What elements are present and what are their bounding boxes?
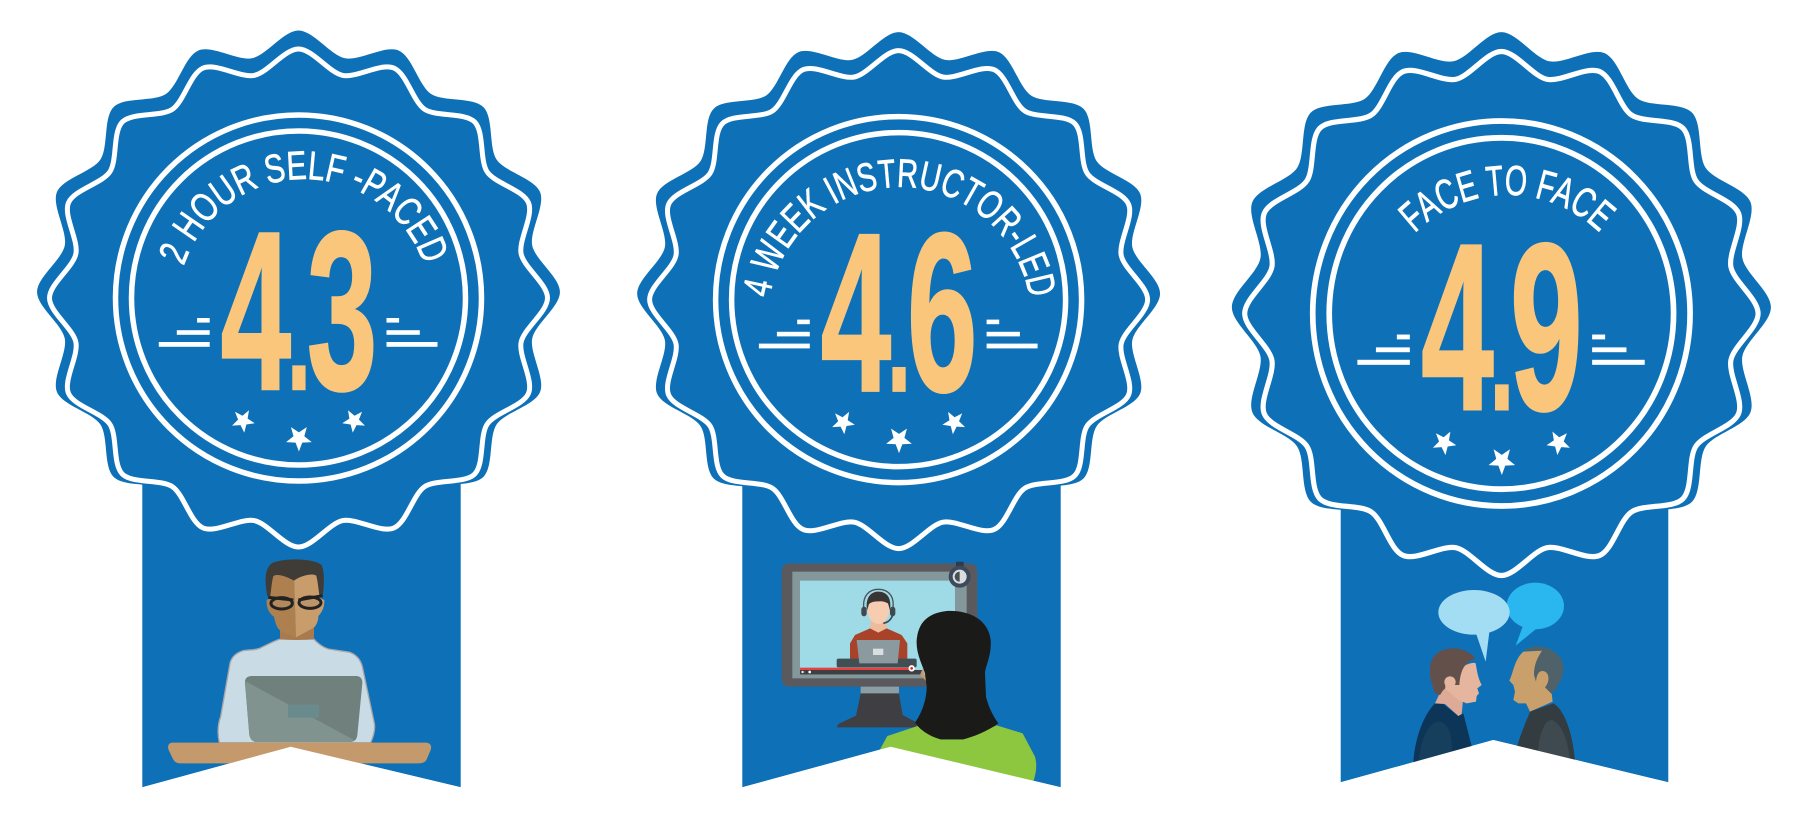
ribbon 2 — [742, 420, 1061, 787]
rating number: . — [287, 253, 311, 421]
ribbon notch 3 — [1341, 740, 1668, 825]
rosette 1 — [37, 30, 560, 550]
laptop logo — [288, 705, 319, 718]
monitor stand — [837, 685, 917, 727]
badge 2: 4 week instructor-led — [637, 32, 1160, 788]
rating number: 4 — [821, 186, 891, 439]
left man — [1413, 648, 1482, 773]
stars — [831, 411, 966, 453]
ribbon 1 — [142, 420, 461, 787]
stars — [1431, 431, 1571, 475]
video player bar — [800, 665, 923, 675]
outer ring — [716, 117, 1082, 483]
ribbon notch 2 — [742, 747, 1061, 825]
outer ring — [1313, 121, 1690, 506]
learner ear — [920, 668, 927, 682]
curved label: 2 HOUR SELF -PACED — [160, 150, 446, 266]
illustration: man with laptop at desk — [168, 559, 431, 763]
speech bubble left — [1438, 590, 1510, 662]
speed lines left — [159, 318, 210, 347]
webcam — [949, 562, 971, 588]
learner black hair — [915, 611, 998, 739]
rosette outer shape — [1232, 32, 1771, 582]
rating number: . — [887, 255, 911, 423]
rosette outer shape — [637, 32, 1160, 555]
rating number: 4 — [221, 184, 291, 437]
curved label: 4 WEEK INSTRUCTOR-LED — [744, 158, 1055, 297]
rating number: 4 — [1421, 194, 1494, 460]
on-screen desk — [837, 659, 917, 667]
stars — [231, 410, 366, 452]
laptop lighter half — [245, 681, 354, 742]
rosette wavy white line — [50, 49, 548, 547]
rating number: . — [1490, 267, 1514, 443]
on-screen laptop — [857, 640, 900, 663]
rating number: 6 — [907, 186, 977, 439]
hair — [266, 559, 324, 597]
rating number: 3 — [307, 184, 377, 437]
neck — [280, 627, 314, 640]
speech bubble right — [1507, 583, 1564, 646]
illustration: learner watching instructor on monitor — [782, 562, 1036, 783]
shirt — [218, 639, 375, 743]
laptop — [245, 676, 362, 742]
badge 3: face to face — [1232, 32, 1771, 782]
speed lines left — [1357, 335, 1410, 365]
desk — [168, 743, 431, 763]
badge 1: 2 hour self-paced — [37, 30, 560, 788]
rosette 3 — [1232, 32, 1771, 578]
rosette outer shape — [37, 31, 560, 553]
rosette wavy white line — [1245, 52, 1758, 575]
rosette 2 — [637, 32, 1160, 552]
monitor frame — [782, 563, 977, 687]
glasses — [268, 596, 323, 609]
on-screen instructor — [850, 589, 907, 659]
face — [267, 574, 324, 637]
ribbon notch 1 — [142, 747, 461, 825]
learner green shirt — [880, 725, 1036, 783]
speed lines right — [386, 318, 438, 347]
rating number: 9 — [1510, 194, 1583, 460]
monitor inner bezel — [792, 572, 967, 678]
ribbon 3 — [1341, 420, 1668, 782]
illustration: two people talking — [1413, 583, 1576, 773]
inner ring — [1329, 138, 1674, 489]
speed lines right — [987, 320, 1038, 348]
right man — [1509, 646, 1576, 773]
curved label: FACE TO FACE — [1397, 165, 1617, 232]
speed lines right — [1592, 335, 1645, 365]
outer ring — [116, 115, 482, 481]
inner ring — [132, 131, 466, 465]
on-screen laptop logo — [873, 649, 883, 655]
speed lines left — [759, 320, 810, 348]
inner ring — [732, 133, 1066, 467]
rosette wavy white line — [650, 51, 1148, 549]
screen — [800, 581, 955, 675]
